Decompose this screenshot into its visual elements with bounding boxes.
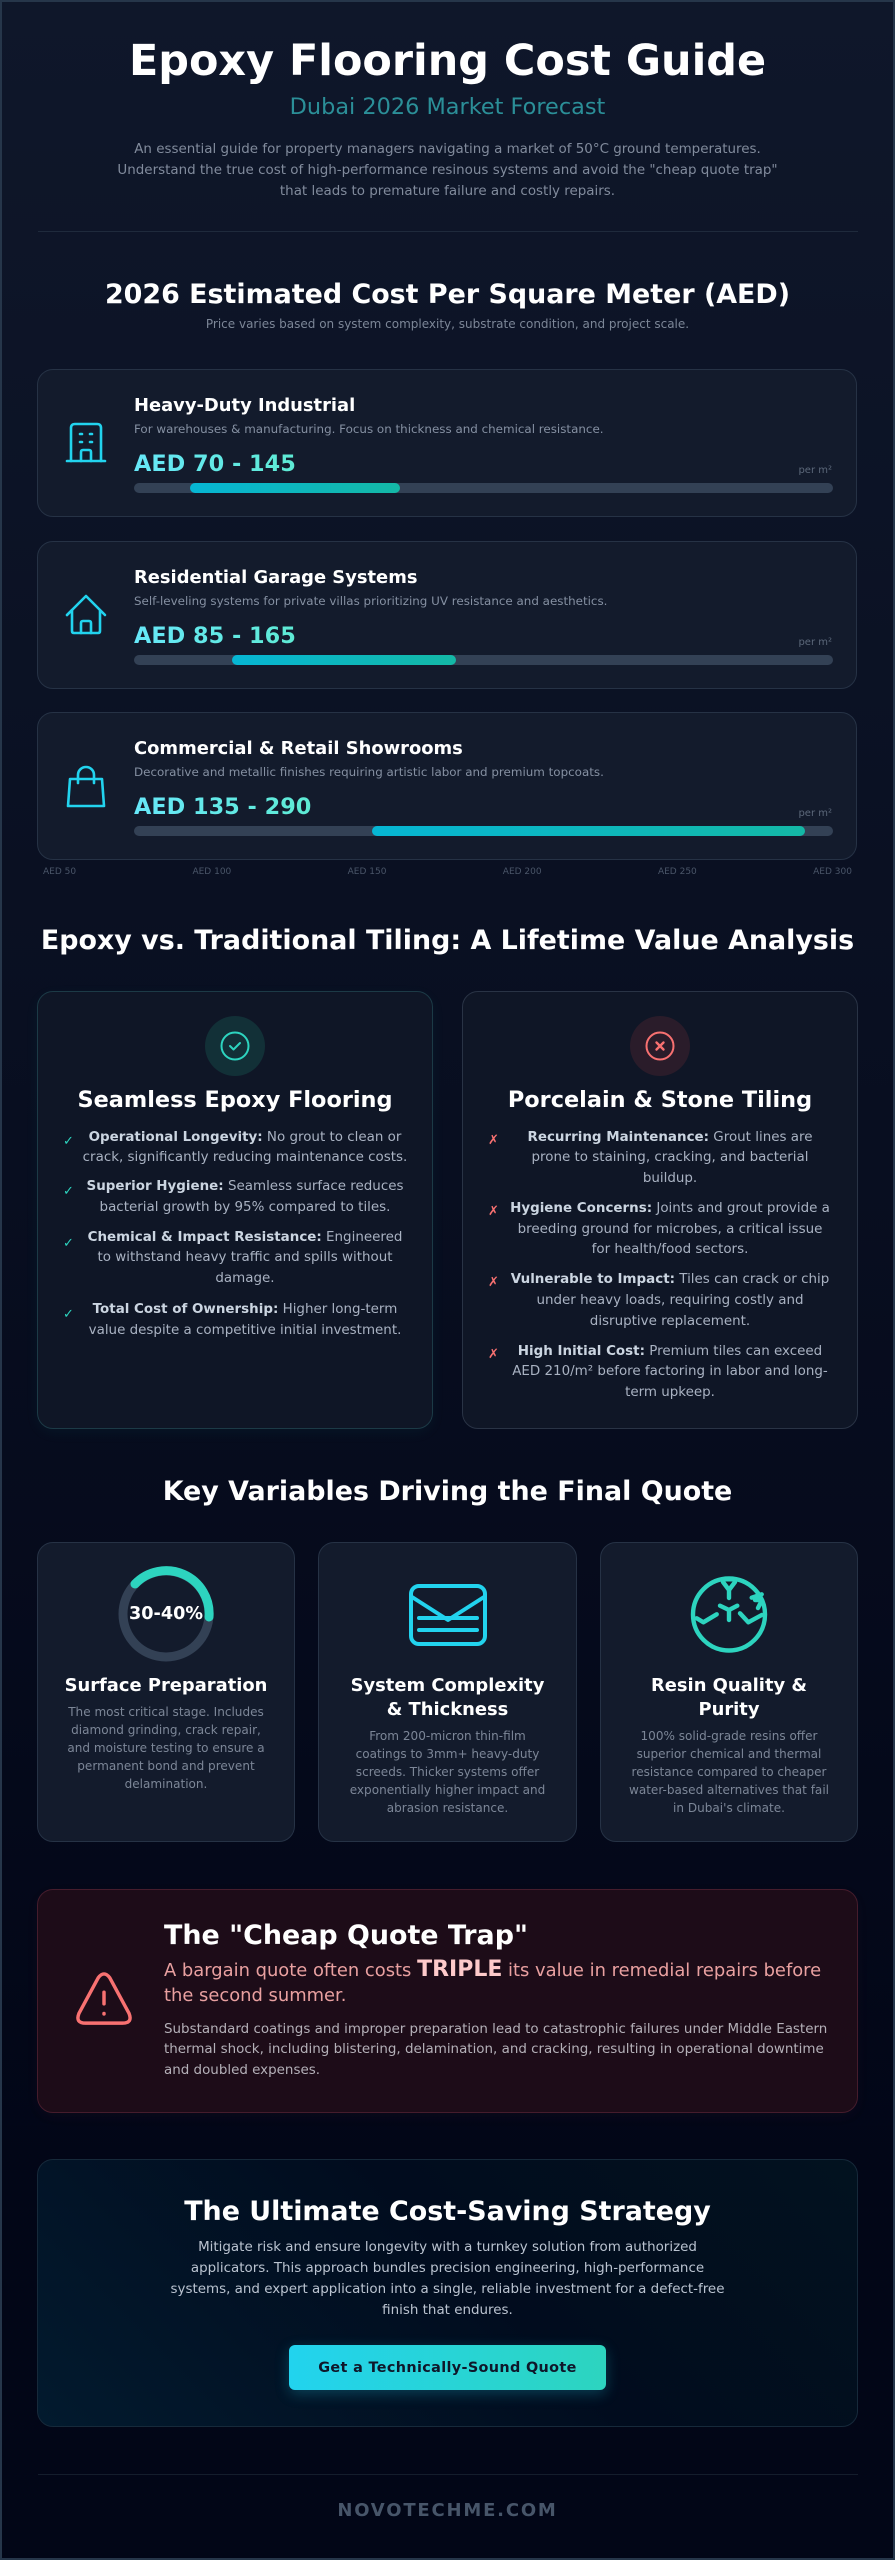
card description: diamond grinding, crack repair,: [71, 1723, 261, 1737]
card description: screeds. Thicker systems offer: [356, 1765, 539, 1779]
card description: abrasion resistance.: [387, 1801, 508, 1815]
card title: Porcelain & Stone Tiling: [508, 1087, 812, 1113]
drawback list: Recurring Maintenance: Grout lines are: [528, 1130, 812, 1144]
panel: residential garage systems: [37, 541, 857, 689]
panel: porcelain and stone tiling: ✗: [488, 1347, 499, 1362]
trap statement: the second summer.: [164, 1984, 346, 2006]
price axis: AED 300: [813, 867, 852, 877]
trap heading: The "Cheap Quote Trap": [164, 1920, 528, 1951]
ring value: 30-40%: [129, 1604, 203, 1624]
price axis: AED 250: [658, 867, 697, 877]
card title: [351, 1674, 544, 1720]
drawback list: prone to staining, cracking, and bacterial: [532, 1150, 808, 1165]
chart: 30-40% ring: [118, 1566, 214, 1662]
drawback list: term upkeep.: [625, 1385, 715, 1400]
card description: The most critical stage. Includes: [68, 1705, 264, 1719]
card description: For warehouses & manufacturing. Focus on thickness and chemical resistance.: [134, 422, 604, 436]
footer brand: NOVOTECHME.COM: [337, 2500, 558, 2520]
benefit list: Total Cost of Ownership: Higher long-term: [93, 1302, 397, 1317]
check marks: ✓: [63, 1184, 74, 1199]
panel: commercial and retail showrooms: [37, 712, 857, 860]
panel: ultimate cost-saving strategy: [37, 2159, 858, 2427]
check marks: ✓: [63, 1307, 74, 1322]
card description: permanent bond and prevent: [77, 1759, 255, 1773]
panel: resin quality and purity: [600, 1542, 858, 1842]
strategy text: Mitigate risk and ensure longevity with a turnkey solution from authorized: [198, 2240, 697, 2255]
card description: [629, 1729, 829, 1815]
panel: heavy-duty industrial: [37, 369, 857, 517]
drawback list: under heavy loads, requiring costly and: [536, 1293, 804, 1308]
intro text: [117, 142, 778, 198]
card description: exponentially higher impact and: [350, 1783, 545, 1797]
drawback list: Hygiene Concerns: Joints and grout provide a: [510, 1201, 830, 1216]
card description: superior chemical and thermal: [637, 1747, 821, 1761]
benefit list: Chemical & Impact Resistance: Engineered: [88, 1230, 402, 1245]
intro text: An essential guide for property managers navigating a market of 50°C ground temperatures.: [134, 142, 761, 156]
card title: & Thickness: [387, 1698, 508, 1720]
price axis: [43, 867, 852, 877]
card title: Heavy-Duty Industrial: [134, 394, 355, 416]
strategy text: applicators. This approach bundles precision engineering, high-performance: [191, 2261, 704, 2276]
range bar: [134, 483, 833, 493]
card title: Purity: [698, 1698, 760, 1720]
card title: Residential Garage Systems: [134, 566, 417, 588]
card description: in Dubai's climate.: [673, 1801, 785, 1815]
cross marks: [488, 1133, 499, 1362]
drawback list: buildup.: [643, 1171, 697, 1186]
card description: delamination.: [125, 1777, 207, 1791]
price axis: AED 50: [43, 867, 76, 877]
heading: cost per square meter: 2026 Estimated Cost Per Square Meter (AED): [105, 279, 790, 310]
price axis: AED 100: [192, 867, 231, 877]
card title: Seamless Epoxy Flooring: [77, 1087, 393, 1113]
drawback list: AED 210/m² before factoring in labor and long-: [512, 1364, 828, 1379]
icon: layered envelope: [409, 1584, 487, 1646]
price axis: AED 150: [348, 867, 386, 877]
trap body text: thermal shock, including blistering, delamination, and cracking, resulting in operational downtime: [164, 2042, 824, 2057]
panel: system complexity and thickness: [318, 1542, 577, 1842]
panel: seamless epoxy flooring: [37, 991, 433, 1429]
range bar: [134, 826, 833, 836]
trap body text: Substandard coatings and improper preparation lead to catastrophic failures under Middle Eastern: [164, 2022, 827, 2036]
panel: porcelain and stone tiling: [462, 991, 858, 1429]
cross marks: ✗: [488, 1204, 499, 1219]
benefit list: bacterial growth by 95% compared to tiles.: [100, 1200, 390, 1215]
card description: resistance compared to cheaper: [632, 1765, 826, 1779]
card description: Decorative and metallic finishes requiring artistic labor and premium topcoats.: [134, 765, 604, 779]
cross marks: ✗: [488, 1133, 499, 1148]
benefit list: to withstand heavy traffic and spills without: [97, 1250, 393, 1265]
benefit list: damage.: [215, 1271, 275, 1286]
card description: coatings to 3mm+ heavy-duty: [356, 1747, 539, 1761]
benefit list: crack, significantly reducing maintenance costs.: [83, 1150, 407, 1165]
icon: resin molecule circle: [690, 1576, 768, 1653]
call-to-action button: [289, 2345, 606, 2390]
intro text: that leads to premature failure and costly repairs.: [280, 184, 615, 198]
card description: 100% solid-grade resins offer: [640, 1729, 817, 1743]
unit label: per m²: [798, 808, 832, 819]
icon: cross circle: [630, 1016, 690, 1076]
strategy text: [171, 2240, 724, 2318]
card title: [651, 1674, 807, 1720]
icon: warning triangle: [76, 1972, 132, 2025]
drawback list: Vulnerable to Impact: Tiles can crack or chip: [511, 1272, 829, 1287]
price axis: AED 200: [503, 867, 542, 877]
benefit list: value despite a competitive initial investment.: [89, 1323, 401, 1338]
check marks: ✓: [63, 1134, 74, 1149]
panel: surface preparation: [37, 1542, 295, 1842]
unit label: per m²: [798, 637, 832, 648]
trap body text: [164, 2022, 827, 2078]
price range: AED 135 - 290: [134, 794, 311, 820]
card description: and moisture testing to ensure a: [67, 1741, 265, 1755]
icon: check circle: [205, 1016, 265, 1076]
cross marks: ✗: [488, 1275, 499, 1290]
card title: Commercial & Retail Showrooms: [134, 738, 463, 758]
benefit list: Superior Hygiene: Seamless surface reduces: [87, 1179, 403, 1194]
check marks: ✓: [63, 1236, 74, 1251]
title: Epoxy Flooring Cost Guide: [129, 36, 766, 86]
trap statement: [164, 1957, 821, 2006]
trap statement: A bargain quote often costs TRIPLE its value in remedial repairs before: [164, 1957, 821, 1982]
panel: cheap quote trap: [37, 1889, 858, 2113]
icon: building: [66, 422, 106, 462]
card description: From 200-micron thin-film: [369, 1729, 526, 1743]
card description: water-based alternatives that fail: [629, 1783, 829, 1797]
card title: Surface Preparation: [65, 1674, 267, 1696]
drawback list: breeding ground for microbes, a critical issue: [518, 1222, 822, 1237]
card title: Resin Quality &: [651, 1674, 807, 1696]
benefit list: [83, 1130, 407, 1338]
heading: key variables: Key Variables Driving the Final Quote: [163, 1476, 732, 1507]
subtitle: Dubai 2026 Market Forecast: [290, 94, 605, 120]
icon: shopping bag: [66, 766, 106, 808]
price range: AED 70 - 145: [134, 451, 296, 477]
drawback list: High Initial Cost: Premium tiles can exceed: [518, 1344, 822, 1359]
benefit list: Operational Longevity: No grout to clean or: [89, 1130, 401, 1144]
card title: System Complexity: [351, 1674, 544, 1696]
card description: Self-leveling systems for private villas prioritizing UV resistance and aesthetics.: [134, 594, 607, 608]
drawback list: [510, 1130, 830, 1400]
strategy text: finish that endures.: [382, 2303, 513, 2318]
heading: lifetime value analysis: Epoxy vs. Traditional Tiling: A Lifetime Value Analysis: [41, 925, 854, 956]
strategy heading: The Ultimate Cost-Saving Strategy: [184, 2196, 711, 2227]
icon: house: [66, 594, 106, 634]
call-to-action button: Get a Technically-Sound Quote: [318, 2360, 577, 2376]
card description: [350, 1729, 545, 1815]
range bar: [134, 655, 833, 665]
unit label: per m²: [798, 465, 832, 476]
price range: AED 85 - 165: [134, 623, 296, 649]
strategy text: systems, and expert application into a single, reliable investment for a defect-free: [171, 2282, 724, 2297]
check marks: [63, 1134, 74, 1322]
trap body text: and doubled expenses.: [164, 2063, 320, 2078]
intro text: Understand the true cost of high-performance resinous systems and avoid the "cheap quote trap": [117, 162, 778, 178]
section subtitle: Price varies based on system complexity, substrate condition, and project scale.: [206, 317, 689, 331]
drawback list: disruptive replacement.: [590, 1314, 750, 1329]
card description: [67, 1705, 265, 1791]
drawback list: for health/food sectors.: [592, 1242, 748, 1257]
